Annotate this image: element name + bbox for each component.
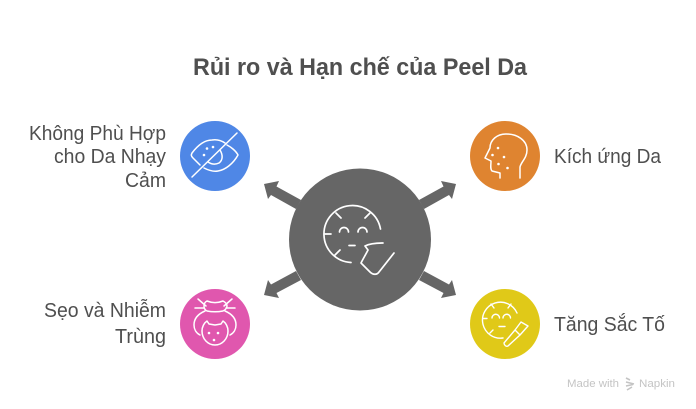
label: Không Phù Hợp	[29, 123, 166, 145]
label: Sẹo và Nhiễm	[44, 299, 166, 322]
arrow: top left	[264, 181, 301, 209]
panel: bottom left risk	[44, 289, 250, 359]
label: cho Da Nhạy	[54, 146, 166, 168]
icon: face with brush	[470, 289, 540, 359]
icon: head with spots	[470, 121, 540, 191]
watermark: Made with	[567, 378, 619, 390]
arrow: top right	[419, 181, 456, 209]
label: Kích ứng Da	[554, 146, 662, 168]
watermark	[567, 378, 675, 390]
icon: face with hand	[324, 206, 394, 274]
title: Rủi ro và Hạn chế của Peel Da	[193, 54, 528, 81]
label: Cảm	[125, 170, 166, 192]
icon: Napkin logo	[626, 378, 634, 390]
watermark: Napkin	[639, 378, 675, 390]
icon: face with hair bun	[180, 289, 250, 359]
label	[44, 299, 166, 348]
arrow: bottom right	[419, 271, 456, 298]
icon: crossed-out eye	[180, 121, 250, 191]
panel: top right risk	[470, 121, 662, 191]
panel: bottom right risk	[470, 289, 665, 359]
label	[29, 123, 166, 192]
panel: top left risk	[29, 121, 250, 192]
label: Trùng	[115, 326, 166, 348]
central circle with face and hand icon	[289, 168, 431, 310]
arrow: bottom left	[264, 271, 301, 298]
label: Tăng Sắc Tố	[554, 313, 665, 336]
